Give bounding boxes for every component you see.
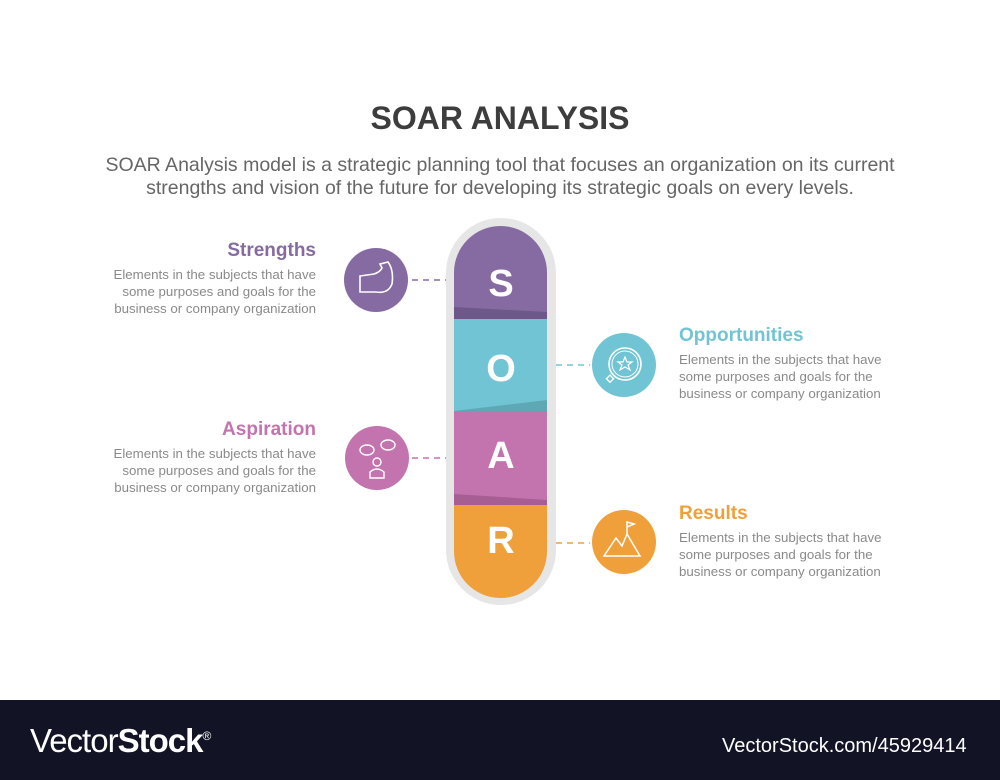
central pill chart: R: [487, 520, 515, 562]
central pill chart: [412, 218, 590, 605]
text block: strengths: some purposes and goals for the: [122, 284, 316, 299]
text block: strengths: Elements in the subjects that have: [113, 267, 316, 282]
icon: strength arm: [344, 248, 408, 312]
text block: opportunities: [679, 325, 882, 401]
text block: aspiration: business or company organization: [114, 480, 316, 495]
subtitle: [105, 154, 895, 199]
subtitle: strengths and vision of the future for developing its strategic goals on every levels.: [146, 177, 854, 199]
text block: results: Elements in the subjects that have: [679, 530, 882, 545]
text block: aspiration: [113, 419, 316, 495]
text block: opportunities: some purposes and goals for the: [679, 369, 873, 384]
subtitle: SOAR Analysis model is a strategic planning tool that focuses an organization on its current: [105, 154, 895, 176]
icon: results mountain: [592, 510, 656, 574]
footer bar: [0, 700, 1000, 780]
text block: aspiration: Elements in the subjects that have: [113, 446, 316, 461]
text block: results: business or company organization: [679, 564, 881, 579]
central pill chart: S: [488, 263, 514, 305]
title: SOAR ANALYSIS: [370, 100, 630, 136]
central pill chart: A: [487, 435, 515, 477]
text block: aspiration: Aspiration: [222, 419, 316, 440]
text block: strengths: Strengths: [227, 240, 316, 261]
text block: strengths: [113, 240, 316, 316]
icon: opportunity magnifier: [592, 333, 656, 397]
text block: results: [679, 503, 882, 579]
text block: aspiration: some purposes and goals for the: [122, 463, 316, 478]
footer logo: VectorStock®: [30, 722, 210, 759]
central pill chart: O: [486, 348, 516, 390]
text block: results: some purposes and goals for the: [679, 547, 873, 562]
footer url: VectorStock.com/45929414: [722, 735, 967, 757]
text block: strengths: business or company organization: [114, 301, 316, 316]
text block: opportunities: business or company organization: [679, 386, 881, 401]
icon: aspiration people talk: [345, 426, 409, 490]
text block: opportunities: Elements in the subjects that have: [679, 352, 882, 367]
text block: opportunities: Opportunities: [679, 325, 804, 346]
text block: results: Results: [679, 503, 748, 524]
